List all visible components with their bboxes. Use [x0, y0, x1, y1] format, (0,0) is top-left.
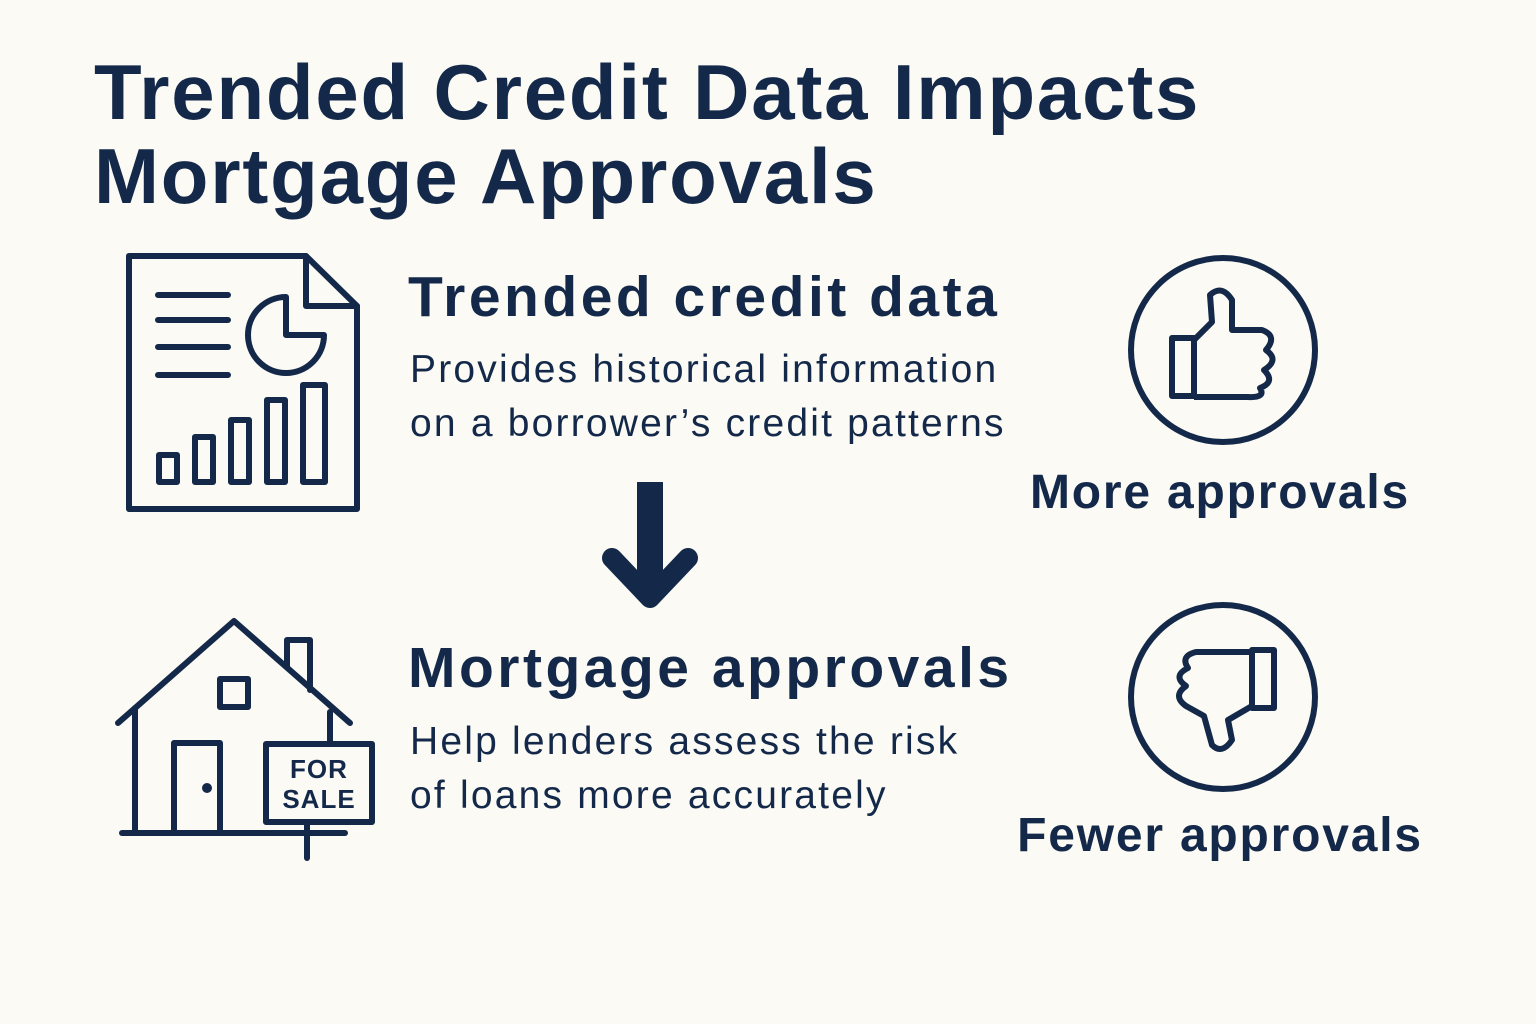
text: trended description: on a borrower’s credit patterns [410, 402, 1006, 445]
icon: house for sale: FOR [290, 754, 348, 784]
heading: trended credit data: Trended credit data [408, 265, 1000, 329]
icon: thumbs up [1128, 255, 1318, 445]
text: trended description: Provides historical information [410, 348, 998, 391]
text: mortgage description [410, 720, 959, 817]
label: more approvals: More approvals [1030, 466, 1410, 519]
text: mortgage description: Help lenders assess the risk [410, 720, 959, 763]
icon: house for sale [115, 618, 375, 861]
title [94, 48, 1200, 220]
text: mortgage description: of loans more accurately [410, 774, 888, 817]
text: trended description [410, 348, 1006, 445]
title: Trended Credit Data Impacts [94, 48, 1200, 136]
heading: mortgage approvals: Mortgage approvals [408, 636, 1013, 700]
icon: thumbs down [1128, 602, 1318, 792]
arrow: down [602, 482, 698, 608]
title: Mortgage Approvals [94, 132, 878, 220]
label: fewer approvals: Fewer approvals [1017, 809, 1423, 862]
icon: house for sale: SALE [282, 784, 356, 814]
icon: credit report document [126, 253, 360, 512]
